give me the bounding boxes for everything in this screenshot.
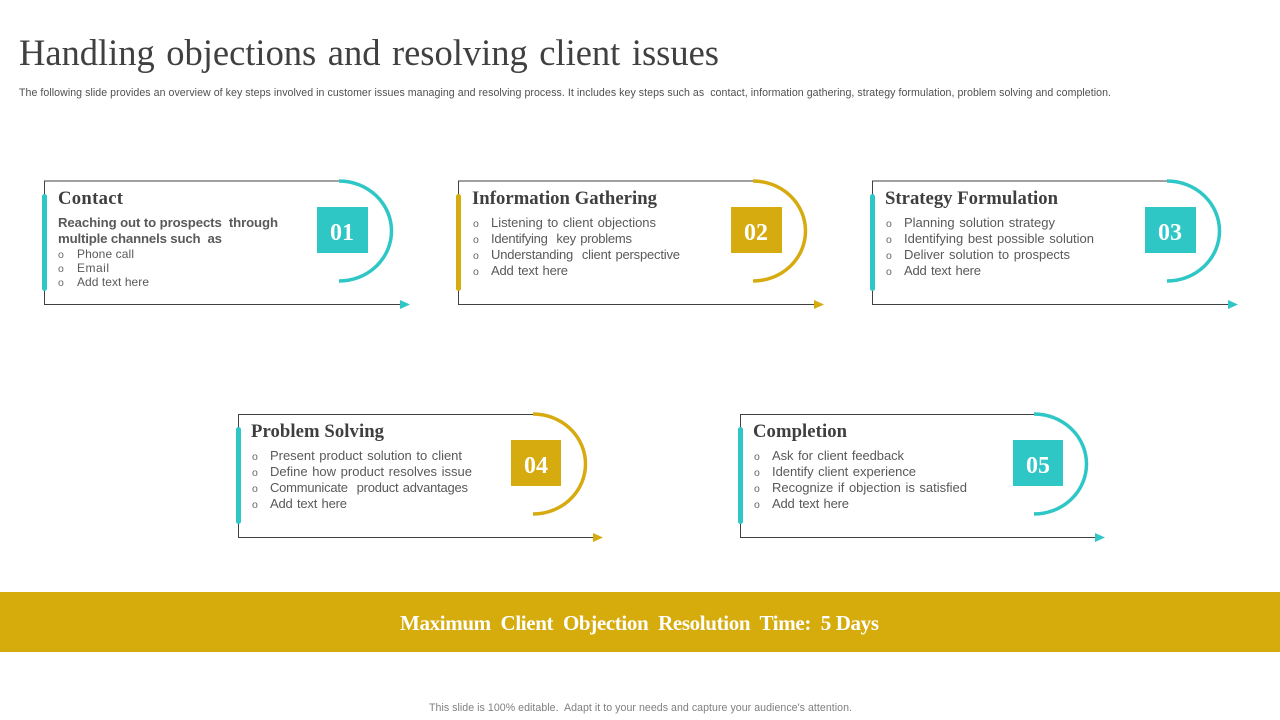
text: strategy formulation list: o bbox=[886, 234, 892, 246]
text: completion list: o bbox=[754, 499, 760, 511]
heading: contact: Contact bbox=[58, 188, 124, 209]
text: strategy formulation list bbox=[886, 215, 1094, 278]
text: strategy formulation list: o bbox=[886, 266, 892, 278]
heading: information gathering: Information Gathering bbox=[472, 188, 658, 209]
heading: strategy formulation: Strategy Formulation bbox=[885, 188, 1059, 209]
text: problem solving list: o bbox=[252, 499, 258, 511]
number 01: 01 bbox=[330, 220, 354, 246]
text: strategy formulation list: Planning solution strategy bbox=[904, 215, 1056, 230]
text: contact details: Phone call bbox=[77, 247, 134, 261]
text: contact details: Add text here bbox=[77, 275, 149, 289]
number 03: 03 bbox=[1158, 220, 1182, 246]
text: completion list: Add text here bbox=[772, 496, 849, 511]
text: completion list: Identify client experience bbox=[772, 464, 916, 479]
text: information gathering list: o bbox=[473, 266, 479, 278]
subtitle: The following slide provides an overview of key steps involved in customer issues managing and resolving process. It includes key steps such as contact, information gathering, strategy formulation, problem solving and completion. bbox=[19, 87, 1111, 99]
text: contact details: o bbox=[58, 249, 64, 261]
text: strategy formulation list: Identifying best possible solution bbox=[904, 231, 1094, 246]
text: contact details: Reaching out to prospects through bbox=[58, 215, 278, 230]
text: problem solving list: o bbox=[252, 467, 258, 479]
text: contact details bbox=[58, 215, 278, 289]
text: information gathering list: o bbox=[473, 218, 479, 230]
panel: step 01 contact bbox=[42, 181, 410, 309]
text: completion list: o bbox=[754, 451, 760, 463]
text: contact details: o bbox=[58, 263, 64, 275]
footer note: This slide is 100% editable. Adapt it to your needs and capture your audience's attention. bbox=[429, 702, 852, 714]
text: completion list bbox=[754, 448, 967, 511]
text: contact details: multiple channels such as bbox=[58, 231, 222, 246]
text: completion list: Ask for client feedback bbox=[772, 448, 904, 463]
text: problem solving list: Define how product resolves issue bbox=[270, 464, 472, 479]
text: strategy formulation list: Deliver solution to prospects bbox=[904, 247, 1070, 262]
text: information gathering list: Understanding client perspective bbox=[491, 247, 680, 262]
text: completion list: o bbox=[754, 483, 760, 495]
text: strategy formulation list: o bbox=[886, 218, 892, 230]
text: information gathering list: o bbox=[473, 250, 479, 262]
text: contact details: o bbox=[58, 277, 64, 289]
text: problem solving list bbox=[252, 448, 472, 511]
panel: step 03 strategy formulation bbox=[870, 181, 1238, 309]
text: information gathering list: Listening to client objections bbox=[491, 215, 656, 230]
title: Handling objections and resolving client issues bbox=[19, 32, 719, 73]
text: information gathering list: Add text here bbox=[491, 263, 568, 278]
text: information gathering list: Identifying key problems bbox=[491, 231, 632, 246]
banner text: Maximum Client Objection Resolution Time: 5 Days bbox=[400, 611, 879, 635]
number 04: 04 bbox=[524, 453, 548, 479]
number 05: 05 bbox=[1026, 453, 1050, 479]
text: problem solving list: Add text here bbox=[270, 496, 347, 511]
heading: problem solving: Problem Solving bbox=[251, 421, 385, 442]
text: strategy formulation list: o bbox=[886, 250, 892, 262]
text: problem solving list: Present product solution to client bbox=[270, 448, 462, 463]
panel: step 04 problem solving bbox=[236, 414, 603, 542]
panel: step 05 completion bbox=[738, 414, 1105, 542]
text: problem solving list: o bbox=[252, 451, 258, 463]
banner bbox=[0, 592, 1280, 652]
text: strategy formulation list: Add text here bbox=[904, 263, 981, 278]
text: information gathering list: o bbox=[473, 234, 479, 246]
text: completion list: o bbox=[754, 467, 760, 479]
number 02: 02 bbox=[744, 220, 768, 246]
heading: completion: Completion bbox=[753, 421, 848, 442]
text: problem solving list: o bbox=[252, 483, 258, 495]
text: completion list: Recognize if objection is satisfied bbox=[772, 480, 967, 495]
text: contact details: Email bbox=[77, 261, 109, 275]
panel: step 02 information gathering bbox=[456, 181, 824, 309]
text: problem solving list: Communicate product advantages bbox=[270, 480, 468, 495]
text: information gathering list bbox=[473, 215, 680, 278]
